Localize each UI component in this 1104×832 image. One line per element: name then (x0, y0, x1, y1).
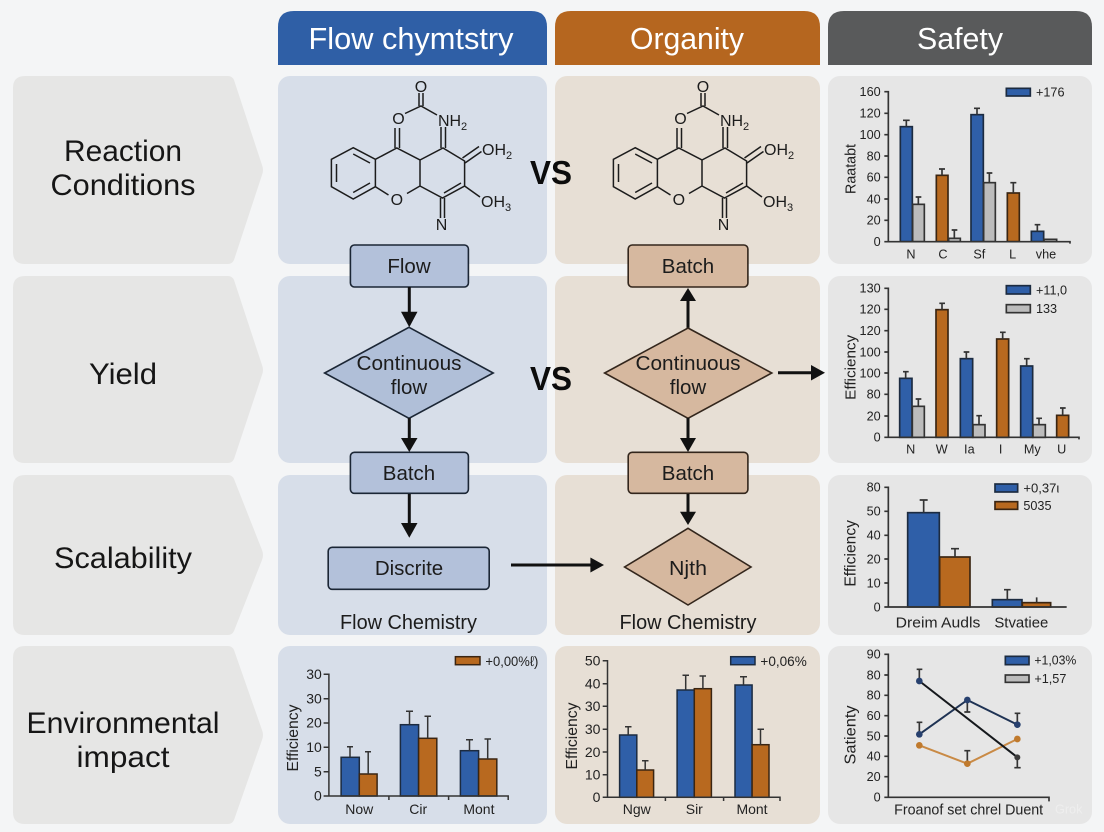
arrow: Continuous flow to safety chart (778, 365, 825, 380)
molecule: flow chemistry: O (391, 192, 403, 209)
molecule: organity: O (674, 111, 687, 128)
axes (884, 654, 1049, 801)
y axis ticks: 20 (867, 214, 881, 228)
molecule: flow chemistry: 2 (461, 121, 467, 133)
molecule: flow chemistry: 3 (505, 202, 511, 214)
y axis ticks: 50 (585, 652, 601, 668)
arrow: Batch to Njth (680, 494, 696, 525)
y axis ticks: 20 (867, 409, 881, 423)
molecule: organity: O (697, 79, 709, 96)
bars (900, 310, 1069, 437)
legend (455, 653, 538, 669)
legend (1006, 85, 1065, 99)
molecule: flow chemistry (331, 79, 512, 234)
column header: Safety (828, 11, 1092, 65)
x axis labels: U (1057, 442, 1066, 456)
row label: Yield: Yield (89, 358, 157, 391)
node: Batch top: Batch (662, 255, 714, 278)
x axis labels (896, 614, 1048, 631)
node: Continuous flow (325, 327, 493, 418)
bar chart: safety, scalability (843, 481, 1067, 631)
node: Discrite (328, 547, 489, 589)
y axis ticks: 0 (593, 789, 601, 805)
row label: Yield (13, 276, 263, 463)
row label: Environmental impact: impact (76, 741, 170, 774)
molecule: flow chemistry: O (415, 79, 427, 96)
row label: Scalability: Scalability (54, 542, 192, 575)
x axis labels: Ngw (623, 801, 652, 817)
vs label: lower: VS (530, 360, 572, 397)
y axis ticks: 90 (867, 648, 881, 662)
molecule: organity: O (673, 192, 685, 209)
error bars (903, 108, 1040, 238)
series: orange (916, 736, 1021, 767)
y axis ticks: 80 (867, 388, 881, 402)
y axis ticks (860, 282, 881, 445)
y axis ticks: 80 (867, 149, 881, 163)
y axis ticks: 100 (860, 128, 881, 142)
y axis ticks: 20 (585, 744, 601, 760)
y axis ticks: 100 (860, 366, 881, 380)
column header: Flow chymtstry: Flow chymtstry (308, 22, 514, 56)
arrow: Continuous flow to Batch (401, 418, 418, 452)
node: Batch: Batch (383, 462, 435, 485)
row label: Environmental impact (13, 646, 263, 824)
caption: Flow Chemistry: Flow Chemistry (620, 611, 757, 634)
bars (900, 115, 1057, 242)
y axis ticks: 80 (867, 481, 881, 495)
y axis ticks: 60 (867, 709, 881, 723)
y axis ticks: 120 (860, 324, 881, 338)
bar chart: safety, reaction conditions (844, 85, 1070, 262)
panel: safety, reaction conditions (828, 76, 1092, 264)
x axis labels (906, 248, 1056, 262)
molecule: flow chemistry: N (436, 217, 447, 234)
node: Batch (350, 452, 468, 493)
row label: Reaction Conditions: Reaction (64, 135, 182, 168)
watermark: Grok (1055, 802, 1083, 816)
node: Flow (350, 245, 468, 287)
y axis ticks: 10 (306, 739, 322, 755)
legend: +0,37ι (1023, 481, 1060, 495)
error bars (903, 303, 1066, 425)
error bars (625, 675, 764, 770)
y axis ticks: 40 (867, 750, 881, 764)
y axis ticks: 5 (314, 763, 322, 779)
panel: flow chemistry, scalability (278, 475, 547, 635)
x axis labels: Mont (463, 801, 495, 817)
y axis ticks (867, 481, 881, 614)
x axis labels (345, 801, 495, 817)
x axis labels: Mont (736, 801, 768, 817)
panel: organity, scalability (555, 475, 820, 635)
x axis labels: N (906, 248, 916, 262)
axes (324, 674, 508, 800)
axes (884, 92, 1070, 244)
y axis ticks: 160 (860, 85, 881, 99)
y axis label: Efficiency (564, 702, 581, 770)
arrow: Continuous flow up to Batch (680, 288, 696, 328)
legend: +176 (1036, 85, 1065, 99)
y axis ticks: 40 (867, 529, 881, 543)
y axis label: Satienty (843, 705, 860, 764)
node: Flow: Flow (387, 255, 431, 278)
x axis labels: L (1009, 248, 1016, 262)
x axis labels: W (936, 442, 948, 456)
x axis labels: Ia (964, 442, 976, 456)
y axis label: Raatabt (844, 144, 860, 194)
molecule: organity: 3 (787, 202, 793, 214)
vs label: upper: VS (530, 154, 572, 191)
panel: flow chemistry, environmental impact (278, 646, 547, 824)
series: blue (916, 697, 1021, 738)
y axis ticks: 10 (585, 766, 601, 782)
bars (341, 725, 497, 796)
molecule: flow chemistry: OH (481, 194, 505, 211)
molecule: flow chemistry: 2 (506, 150, 512, 162)
x axis labels: Now (345, 801, 374, 817)
node: Batch lower (628, 452, 748, 493)
arrow: Continuous flow to Batch (680, 418, 696, 452)
node: Continuous flow (605, 328, 772, 418)
panel: organity, environmental impact (555, 646, 820, 824)
panel: flow chemistry, reaction conditions (278, 76, 547, 264)
molecule: flow chemistry: OH (482, 142, 506, 159)
y axis ticks: 40 (585, 676, 601, 692)
x axis labels: Dreim Audls (896, 614, 980, 631)
line chart: safety, environmental impact (843, 648, 1083, 819)
row label: Reaction Conditions (13, 76, 263, 264)
y axis ticks: 0 (314, 788, 322, 804)
node: Continuous flow: flow (391, 376, 427, 399)
axes (603, 661, 780, 801)
node: Continuous flow: flow (670, 376, 706, 399)
row label: Environmental impact: Environmental (26, 707, 220, 740)
y axis ticks: 20 (867, 770, 881, 784)
y axis ticks: 120 (860, 303, 881, 317)
legend: 133 (1036, 302, 1057, 316)
x axis labels: vhe (1036, 248, 1056, 262)
row label: Scalability (13, 475, 263, 635)
y axis label: Efficiency (285, 704, 302, 772)
legend: +1,57 (1034, 672, 1066, 686)
legend (731, 653, 807, 669)
node: Discrite: Discrite (375, 557, 443, 580)
x axis labels: I (999, 442, 1002, 456)
x axis labels: Stvatiee (994, 614, 1048, 631)
node: Continuous flow: Continuous (636, 352, 740, 375)
flowchart: organity column (605, 245, 772, 634)
y axis ticks: 0 (874, 791, 881, 805)
molecule: organity: OH (764, 142, 788, 159)
y axis ticks: 20 (306, 715, 322, 731)
legend: +11,0 (1036, 283, 1067, 297)
y axis ticks: 0 (874, 431, 881, 445)
y axis ticks: 10 (867, 576, 881, 590)
x axis labels: Sf (973, 248, 986, 262)
y axis ticks (585, 652, 601, 805)
column header: Organity: Organity (630, 22, 745, 56)
y axis ticks: 80 (867, 689, 881, 703)
molecule: organity: 2 (788, 150, 794, 162)
y axis ticks: 30 (585, 698, 601, 714)
x axis labels: Cir (409, 801, 427, 817)
bars (620, 685, 769, 797)
y axis ticks (867, 648, 881, 805)
y axis ticks: 60 (867, 171, 881, 185)
x axis labels: My (1024, 442, 1041, 456)
arrow: Flow to Continuous flow (401, 287, 418, 327)
bar chart: organity, environmental impact (564, 652, 807, 817)
node: Batch lower: Batch (662, 462, 714, 485)
error bars (917, 669, 1021, 768)
y axis ticks: 30 (306, 690, 322, 706)
y axis ticks: 130 (860, 282, 881, 296)
series: black (916, 678, 1020, 760)
y axis ticks: 0 (874, 600, 881, 614)
legend (1006, 283, 1067, 316)
legend: 5035 (1023, 499, 1051, 513)
panel: organity, reaction conditions (555, 76, 820, 264)
legend: +0,00%ℓ) (485, 653, 538, 669)
molecule: organity (613, 79, 794, 234)
y axis label: Efficiency (843, 334, 860, 400)
y axis ticks: 20 (867, 552, 881, 566)
bar chart: flow chemistry, environmental impact (285, 653, 538, 817)
error bars (920, 500, 1037, 603)
legend (995, 481, 1060, 513)
y axis ticks: 80 (867, 668, 881, 682)
node: Batch top (628, 245, 748, 287)
panel: organity, yield (555, 276, 820, 463)
x axis labels (906, 442, 1066, 456)
panel: safety, environmental impact (828, 646, 1092, 824)
legend: +0,06% (760, 653, 807, 669)
legend: +1,03% (1034, 654, 1076, 668)
x axis label: Froanof set chrel Duent (894, 803, 1043, 819)
y axis ticks (306, 666, 322, 804)
molecule: flow chemistry: NH (438, 113, 461, 130)
y axis label: Efficiency (843, 520, 860, 587)
y axis ticks: 50 (867, 729, 881, 743)
y axis ticks: 120 (860, 107, 881, 121)
arrow: Discrite to Njth (511, 558, 604, 572)
node: Njth: Njth (669, 557, 707, 580)
y axis ticks: 50 (867, 505, 881, 519)
column header: Flow chymtstry (278, 11, 547, 65)
x axis labels: Sir (686, 801, 703, 817)
row label: Reaction Conditions: Conditions (50, 169, 196, 202)
molecule: organity: NH (720, 113, 743, 130)
y axis ticks: 30 (585, 721, 601, 737)
y axis ticks: 40 (867, 192, 881, 206)
molecule: organity: 2 (743, 121, 749, 133)
panel: flow chemistry, yield (278, 276, 547, 463)
y axis ticks (860, 85, 881, 249)
y axis ticks: 30 (306, 666, 322, 682)
panel: safety, yield (828, 276, 1092, 463)
flowchart: flow chemistry column (325, 245, 493, 634)
y axis ticks: 100 (860, 345, 881, 359)
bar chart: safety, yield (843, 282, 1079, 456)
node: Continuous flow: Continuous (356, 352, 462, 375)
error bars (347, 711, 491, 774)
axes (884, 288, 1079, 439)
molecule: flow chemistry: O (392, 111, 405, 128)
molecule: organity: OH (763, 194, 787, 211)
axes (884, 487, 1067, 607)
caption: Flow Chemistry: Flow Chemistry (340, 611, 478, 634)
column header: Organity (555, 11, 820, 65)
bars (908, 513, 1051, 607)
y axis ticks: 0 (874, 235, 881, 249)
panel: safety, scalability (828, 475, 1092, 635)
x axis labels: N (906, 442, 915, 456)
legend (1005, 654, 1076, 686)
x axis labels: C (938, 248, 948, 262)
column header: Safety: Safety (917, 22, 1004, 56)
x axis labels (623, 801, 768, 817)
node: Njth (625, 528, 751, 605)
arrow: Batch to Discrite (401, 494, 418, 538)
molecule: organity: N (718, 217, 729, 234)
